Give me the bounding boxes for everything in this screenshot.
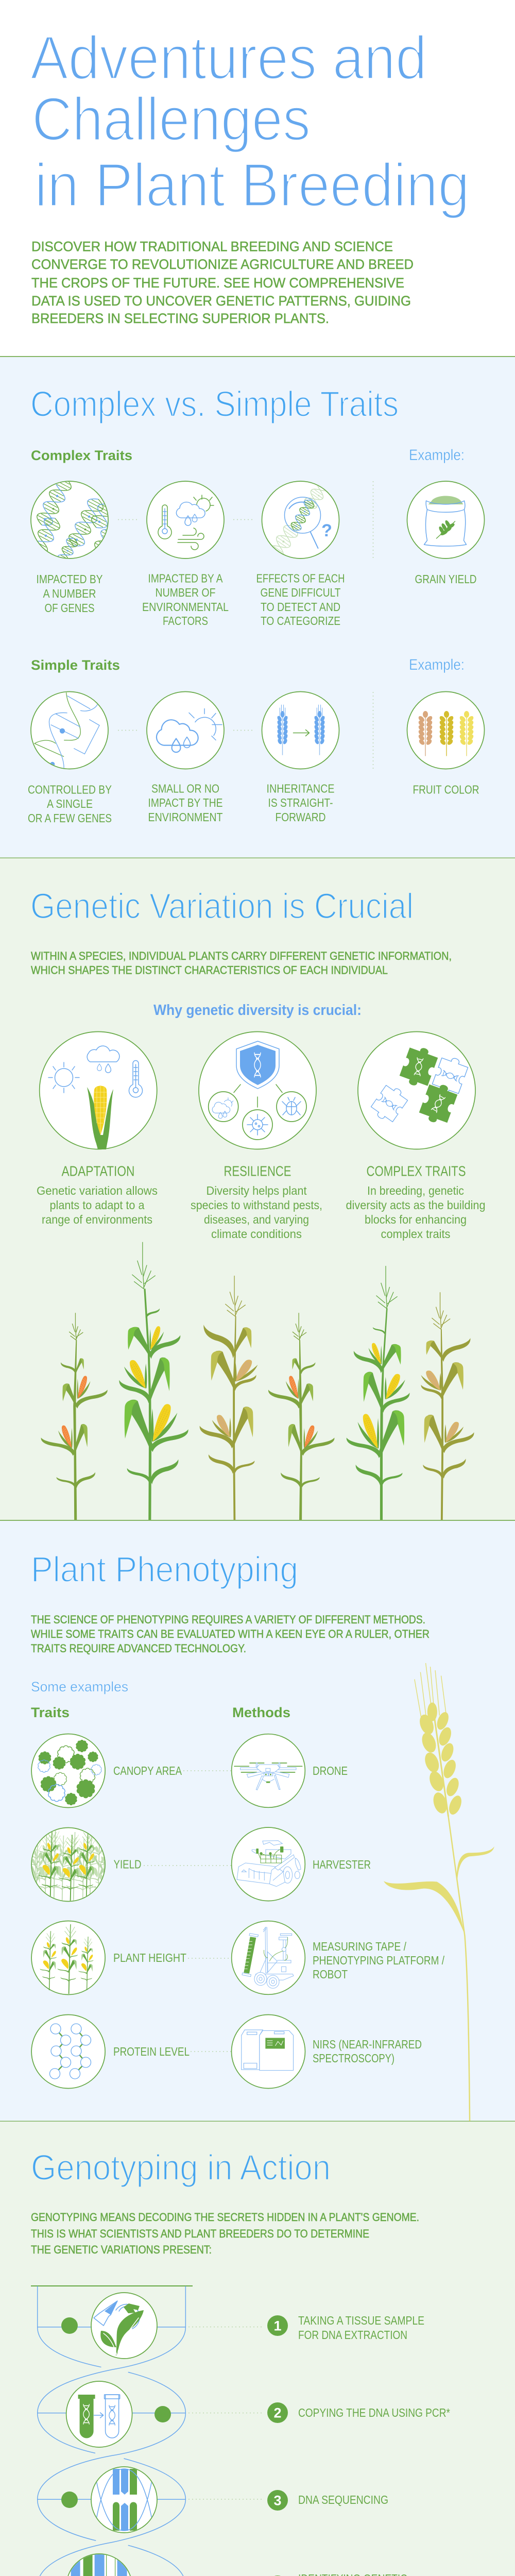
labels: simple traits: SMALL OR NO bbox=[151, 782, 219, 795]
captions: why diversity: In breeding, genetic bbox=[367, 1184, 464, 1197]
intro: genotyping: THIS IS WHAT SCIENTISTS AND PLANT BREEDERS DO TO DETERMINE bbox=[31, 2227, 369, 2240]
captions: why diversity: Genetic variation allows bbox=[37, 1184, 158, 1197]
icon: measuring tape and robot bbox=[232, 1921, 305, 1994]
background: phenotyping section bbox=[0, 1520, 515, 2121]
captions: why diversity: blocks for enhancing bbox=[365, 1213, 467, 1226]
labels: complex traits: EFFECTS OF EACH bbox=[256, 572, 345, 585]
plant 3 bbox=[200, 1276, 258, 1520]
labels: complex traits: TO CATEGORIZE bbox=[261, 614, 340, 628]
labels: simple traits: FRUIT COLOR bbox=[413, 783, 479, 796]
captions: why diversity: ADAPTATION bbox=[62, 1163, 135, 1179]
icon: many genes dna bbox=[30, 481, 109, 559]
labels: traits: CANOPY AREA bbox=[113, 1764, 182, 1777]
captions: why diversity: COMPLEX TRAITS bbox=[367, 1163, 466, 1179]
illustration: corn plants bbox=[41, 1242, 474, 1520]
icon: drone bbox=[232, 1734, 305, 1807]
labels: simple traits: ENVIRONMENT bbox=[148, 810, 222, 824]
icon: fruit color bbox=[407, 691, 484, 769]
icon: adaptation corn bbox=[40, 1031, 157, 1149]
subheading: traits: Traits bbox=[31, 1705, 70, 1720]
intro: phenotyping: TRAITS REQUIRE ADVANCED TECHNOLOGY. bbox=[31, 1642, 246, 1655]
heading: genetic variation: Genetic Variation is Crucial bbox=[30, 886, 414, 926]
captions: why diversity: species to withstand pests, bbox=[191, 1198, 322, 1212]
icon: harvester bbox=[232, 1827, 305, 1901]
illustration: wheat stalk bbox=[384, 1663, 494, 2121]
labels: complex traits: ENVIRONMENTAL bbox=[142, 600, 229, 614]
labels: complex traits: FACTORS bbox=[163, 614, 208, 628]
connectors: traits to methods bbox=[144, 1771, 231, 2052]
labels: simple traits bbox=[28, 782, 479, 825]
plant 5 bbox=[347, 1266, 409, 1520]
intro text: DISCOVER HOW TRADITIONAL BREEDING AND SCIENCE bbox=[31, 239, 393, 255]
labels: complex traits bbox=[36, 572, 477, 628]
labels: simple traits: IS STRAIGHT- bbox=[268, 796, 333, 809]
captions: why diversity bbox=[37, 1163, 485, 1241]
labels: methods: PHENOTYPING PLATFORM / bbox=[313, 1954, 445, 1967]
icon: few genes dna bbox=[31, 691, 108, 769]
background: genetic variation section bbox=[0, 858, 515, 1520]
labels: methods: MEASURING TAPE / bbox=[313, 1940, 407, 1953]
intro: genetic variation: WITHIN A SPECIES, INDIVIDUAL PLANTS CARRY DIFFERENT GENETIC INFORMATION, bbox=[31, 950, 452, 962]
intro text: DATA IS USED TO UNCOVER GENETIC PATTERNS, GUIDING bbox=[31, 293, 411, 309]
captions: why diversity: RESILIENCE bbox=[224, 1163, 291, 1179]
heading: complex vs simple traits: Complex vs. Simple Traits bbox=[30, 384, 399, 424]
labels: methods bbox=[313, 1764, 445, 2065]
icon: canopy area bbox=[31, 1734, 105, 1807]
labels: complex traits: NUMBER OF bbox=[156, 586, 215, 599]
captions: why diversity: complex traits bbox=[381, 1227, 450, 1241]
captions: why diversity: diversity acts as the building bbox=[346, 1198, 485, 1212]
intro text: CONVERGE TO REVOLUTIONIZE AGRICULTURE AND BREED bbox=[31, 257, 414, 272]
captions: why diversity: climate conditions bbox=[211, 1227, 302, 1241]
diagram: dna helix backbone bbox=[31, 2286, 193, 2576]
icon: resilience shield bbox=[199, 1031, 316, 1149]
labels: simple traits: FORWARD bbox=[275, 810, 325, 824]
title: Challenges bbox=[32, 85, 311, 154]
labels: complex traits: A NUMBER bbox=[43, 587, 96, 600]
icon: pcr tubes bbox=[66, 2381, 132, 2447]
heading: genotyping in action: Genotyping in Action bbox=[31, 2147, 331, 2188]
plant 2 bbox=[119, 1242, 188, 1520]
intro: genotyping: THE GENETIC VARIATIONS PRESENT: bbox=[31, 2243, 212, 2256]
title: in Plant Breeding bbox=[35, 151, 470, 219]
background: header bbox=[0, 0, 515, 357]
labels: genotyping steps: COPYING THE DNA USING PCR* bbox=[298, 2406, 450, 2419]
icon: plant height bbox=[31, 1921, 105, 1995]
labels: methods: ROBOT bbox=[313, 1968, 348, 1981]
label: example: Example: bbox=[409, 447, 465, 464]
captions: why diversity: plants to adapt to a bbox=[49, 1198, 145, 1212]
background: genotyping section bbox=[0, 2121, 515, 2576]
labels: genotyping steps: TAKING A TISSUE SAMPLE bbox=[298, 2314, 424, 2327]
labels: simple traits: IMPACT BY THE bbox=[148, 796, 222, 809]
labels: simple traits: CONTROLLED BY bbox=[28, 783, 112, 796]
labels: traits: PROTEIN LEVEL bbox=[113, 2045, 190, 2058]
intro: genotyping: GENOTYPING MEANS DECODING THE SECRETS HIDDEN IN A PLANT'S GENOME. bbox=[31, 2211, 419, 2224]
captions: why diversity: range of environments bbox=[42, 1213, 152, 1226]
labels: methods: DRONE bbox=[313, 1764, 348, 1777]
labels: methods: HARVESTER bbox=[313, 1858, 371, 1871]
intro: phenotyping: WHILE SOME TRAITS CAN BE EVALUATED WITH A KEEN EYE OR A RULER, OTHER bbox=[31, 1628, 430, 1640]
intro text bbox=[31, 239, 414, 326]
intro: phenotyping: THE SCIENCE OF PHENOTYPING REQUIRES A VARIETY OF DIFFERENT METHODS. bbox=[31, 1613, 425, 1626]
connectors: genotyping steps bbox=[189, 2327, 264, 2576]
icon: yield bbox=[27, 1828, 110, 1902]
labels: genotyping steps bbox=[298, 2314, 450, 2576]
subheading: complex traits: Complex Traits bbox=[31, 448, 132, 463]
labels: complex traits: TO DETECT AND bbox=[261, 600, 340, 614]
icon: inheritance bbox=[262, 691, 339, 769]
plant 4 bbox=[268, 1313, 334, 1520]
badges: genotyping steps: 2 bbox=[273, 2405, 282, 2420]
labels: traits: PLANT HEIGHT bbox=[113, 1951, 186, 1964]
labels: genotyping steps: DNA SEQUENCING bbox=[298, 2493, 388, 2506]
badges: genotyping steps: 1 bbox=[273, 2318, 282, 2334]
labels: simple traits: INHERITANCE bbox=[267, 782, 335, 795]
captions: why diversity: Diversity helps plant bbox=[206, 1184, 307, 1197]
labels: methods: NIRS (NEAR-INFRARED bbox=[313, 2038, 422, 2051]
icon: magnifier over gene: ? bbox=[321, 521, 332, 540]
intro: genetic variation: WHICH SHAPES THE DISTINCT CHARACTERISTICS OF EACH INDIVIDUAL bbox=[31, 963, 388, 977]
icon: environmental factors bbox=[147, 481, 224, 558]
intro text: THE CROPS OF THE FUTURE. SEE HOW COMPREHENSIVE bbox=[31, 275, 404, 291]
labels: complex traits: GENE DIFFICULT bbox=[261, 586, 341, 599]
intro: phenotyping bbox=[31, 1613, 430, 1655]
intro: genetic variation bbox=[31, 950, 452, 977]
labels: complex traits: OF GENES bbox=[44, 601, 95, 615]
icon: protein level bbox=[31, 2014, 105, 2089]
plant 6 bbox=[421, 1292, 474, 1520]
plant 1 bbox=[41, 1313, 108, 1520]
connectors: simple traits bbox=[118, 692, 373, 769]
intro: genotyping bbox=[31, 2211, 419, 2256]
labels: traits: YIELD bbox=[113, 1858, 141, 1871]
labels: complex traits: IMPACTED BY A bbox=[148, 572, 223, 585]
label: example 2: Example: bbox=[409, 656, 465, 673]
labels: complex traits: IMPACTED BY bbox=[36, 572, 103, 586]
labels: traits bbox=[113, 1764, 190, 2058]
connectors: complex traits bbox=[118, 482, 373, 558]
labels: complex traits: GRAIN YIELD bbox=[415, 572, 477, 586]
intro text: BREEDERS IN SELECTING SUPERIOR PLANTS. bbox=[31, 311, 329, 326]
subheading: why diversity: Why genetic diversity is crucial: bbox=[153, 1002, 362, 1019]
icon: weather bbox=[147, 691, 224, 769]
background: traits section bbox=[0, 357, 515, 858]
icon: dna sequencing bbox=[91, 2467, 157, 2533]
icon: grain sack bbox=[407, 481, 484, 558]
icon: complex traits puzzle bbox=[358, 1031, 475, 1149]
subheading: methods: Methods bbox=[232, 1705, 290, 1720]
labels: methods: SPECTROSCOPY) bbox=[313, 2052, 394, 2065]
badges: genotyping steps: 3 bbox=[273, 2493, 282, 2508]
labels: simple traits: A SINGLE bbox=[47, 797, 93, 810]
heading: plant phenotyping: Plant Phenotyping bbox=[31, 1549, 298, 1589]
labels: simple traits: OR A FEW GENES bbox=[28, 811, 112, 825]
title: Adventures and bbox=[30, 24, 427, 92]
icon: nirs instrument bbox=[232, 2014, 305, 2089]
title bbox=[30, 24, 470, 219]
subheading: simple traits: Simple Traits bbox=[31, 657, 120, 673]
captions: why diversity: diseases, and varying bbox=[204, 1213, 309, 1226]
icon: magnifier over gene bbox=[262, 481, 340, 559]
label: some examples: Some examples bbox=[31, 1679, 128, 1694]
icon: tissue sample bbox=[91, 2293, 157, 2359]
labels: genotyping steps: FOR DNA EXTRACTION bbox=[298, 2328, 407, 2342]
badges: genotyping steps bbox=[267, 2315, 288, 2576]
icon: genetic variations bbox=[66, 2553, 132, 2576]
